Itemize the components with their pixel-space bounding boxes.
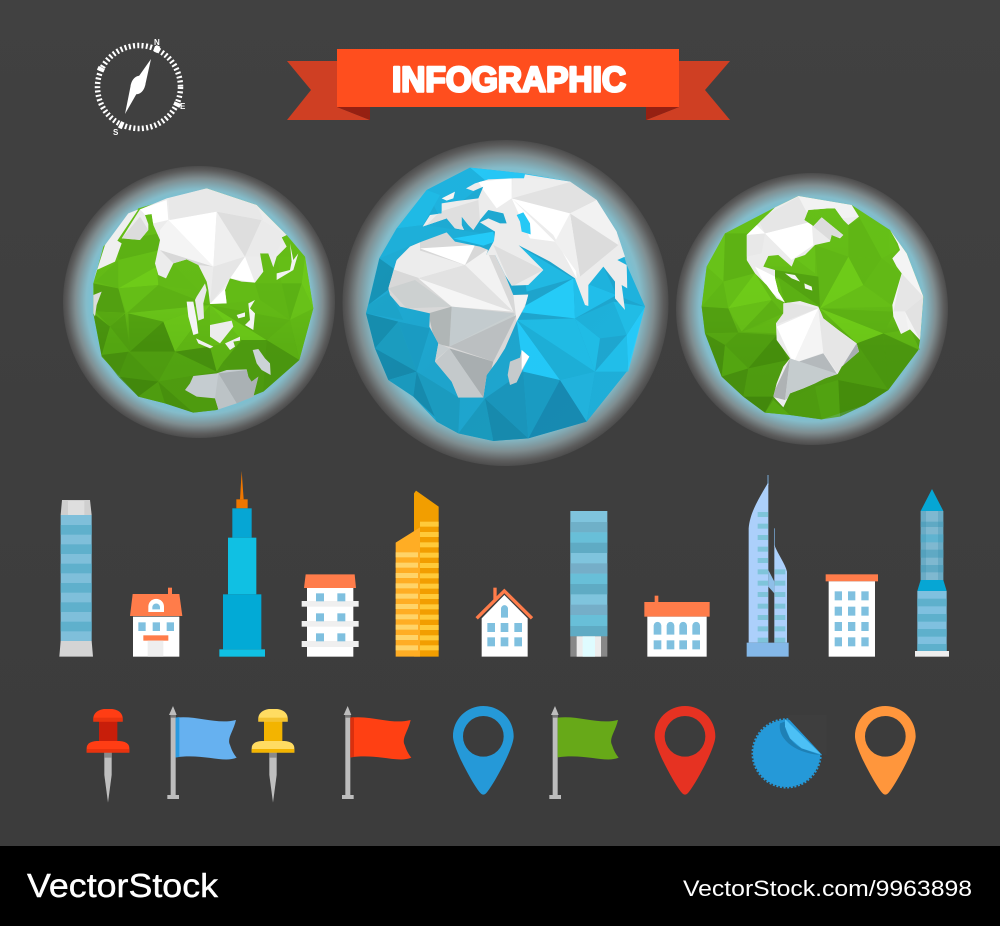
building: blue glass tower — [570, 511, 607, 657]
building: office block with orange roof — [826, 574, 878, 657]
landmass: Europe and Africa edge — [890, 230, 924, 340]
icon: red map marker — [655, 706, 715, 795]
landmass: north Asia — [122, 188, 287, 304]
landmass: Eurasia — [420, 172, 630, 315]
title text: INFOGRAPHIC — [392, 60, 626, 100]
skyline: right buildings — [477, 475, 949, 657]
icon: orange map marker — [855, 706, 916, 795]
footer image id: VectorStock.com/9963898 — [683, 876, 972, 901]
icon: yellow push pin — [252, 709, 294, 803]
compass: N — [154, 38, 160, 47]
skyline: left buildings — [59, 471, 439, 657]
building: orange striped tower — [396, 491, 439, 657]
landmass: Australia — [185, 369, 258, 409]
icon: green flag — [549, 706, 619, 799]
compass — [84, 32, 194, 142]
compass: E — [180, 102, 186, 111]
building: small house with orange roof — [130, 588, 182, 657]
map icons: right group — [453, 706, 916, 799]
building: wide house with arched windows — [644, 596, 710, 657]
compass: S — [113, 128, 119, 137]
landmass: South America — [772, 300, 862, 410]
Caspian Sea — [517, 212, 531, 234]
Madagascar — [508, 350, 529, 385]
footer brand: VectorStock — [27, 867, 219, 904]
globe: Africa and Eurasia — [342, 140, 668, 466]
building: spire tower — [915, 489, 949, 657]
building: glass tower with grey cap — [59, 500, 93, 657]
icon: peeling blue sticker — [752, 715, 827, 788]
landmass: North America — [746, 196, 859, 302]
icon: blue flag — [167, 706, 237, 799]
icon: red push pin — [87, 709, 129, 803]
title ribbon — [287, 49, 730, 120]
building: apartment block with balconies — [302, 574, 359, 657]
icon: blue map marker — [453, 706, 514, 795]
building: white gabled house — [477, 588, 532, 657]
building: stepped blue skyscraper — [219, 471, 265, 657]
map icons: left group — [87, 706, 411, 803]
globe: Asia and Australia — [63, 166, 335, 438]
landmass: Africa — [387, 228, 533, 402]
icon: red flag — [342, 706, 411, 799]
globe: Americas — [676, 173, 948, 445]
footer bar — [0, 846, 1000, 926]
building: twin-sail blue tower — [747, 475, 789, 657]
